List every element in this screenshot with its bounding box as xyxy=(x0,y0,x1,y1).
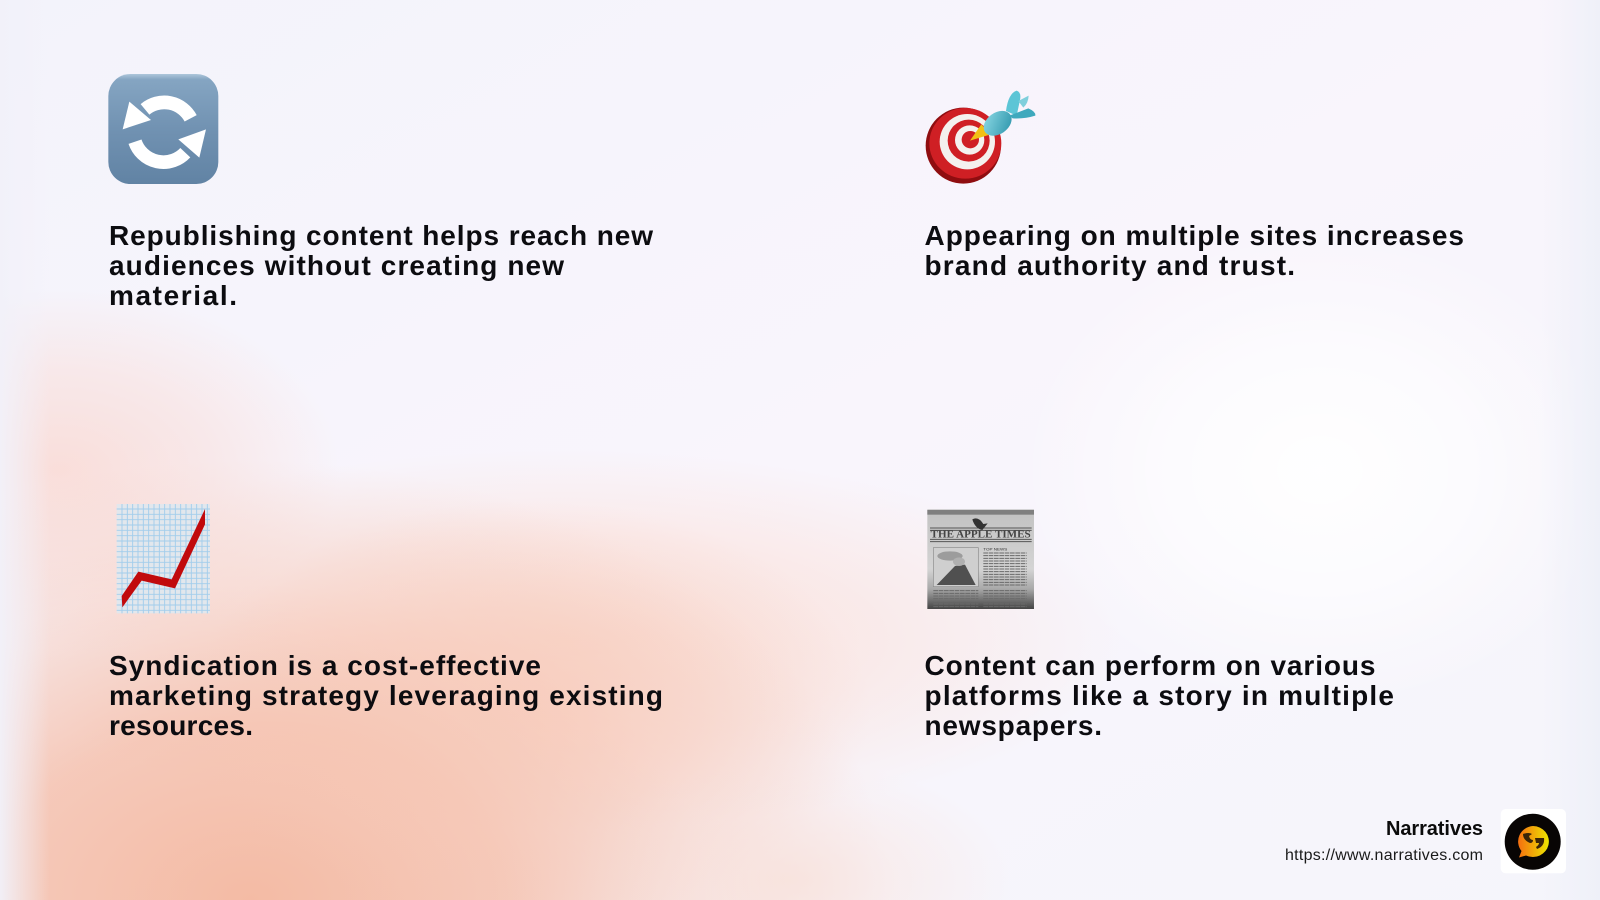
panel: republishing xyxy=(108,74,653,311)
text: syndication: Syndication is a cost-effective xyxy=(109,650,541,681)
text: platforms: Content can perform on various xyxy=(924,650,1376,681)
icon: rising chart xyxy=(117,504,210,613)
icon: newspaper: TOP NEWS xyxy=(983,547,1008,552)
text: authority: Appearing on multiple sites increases xyxy=(924,220,1464,251)
text: republishing xyxy=(109,220,653,311)
brand name: Narratives xyxy=(1386,818,1483,840)
text: republishing: Republishing content helps reach new xyxy=(109,220,653,251)
text: syndication xyxy=(109,650,663,741)
icon: newspaper: THE APPLE TIMES xyxy=(931,528,1031,540)
text: platforms xyxy=(924,650,1394,741)
text: platforms: newspapers. xyxy=(924,710,1102,741)
text: syndication: marketing strategy leveraging existing xyxy=(109,680,663,711)
icon: refresh arrows xyxy=(108,74,218,184)
text: syndication: resources. xyxy=(109,710,253,741)
panel: syndication xyxy=(109,504,663,741)
icon: newspaper xyxy=(927,509,1034,609)
icon: dart target xyxy=(926,91,1035,184)
text: authority xyxy=(924,220,1464,281)
text: authority: brand authority and trust. xyxy=(924,250,1295,281)
brand url: https://www.narratives.com xyxy=(1285,847,1483,864)
logo xyxy=(1501,809,1566,873)
text: republishing: audiences without creating new xyxy=(109,250,564,281)
panel: authority xyxy=(924,91,1464,281)
panel: platforms xyxy=(924,509,1394,741)
footer brand xyxy=(1285,809,1566,873)
text: republishing: material. xyxy=(109,280,237,311)
text: platforms: platforms like a story in multiple xyxy=(924,680,1394,711)
